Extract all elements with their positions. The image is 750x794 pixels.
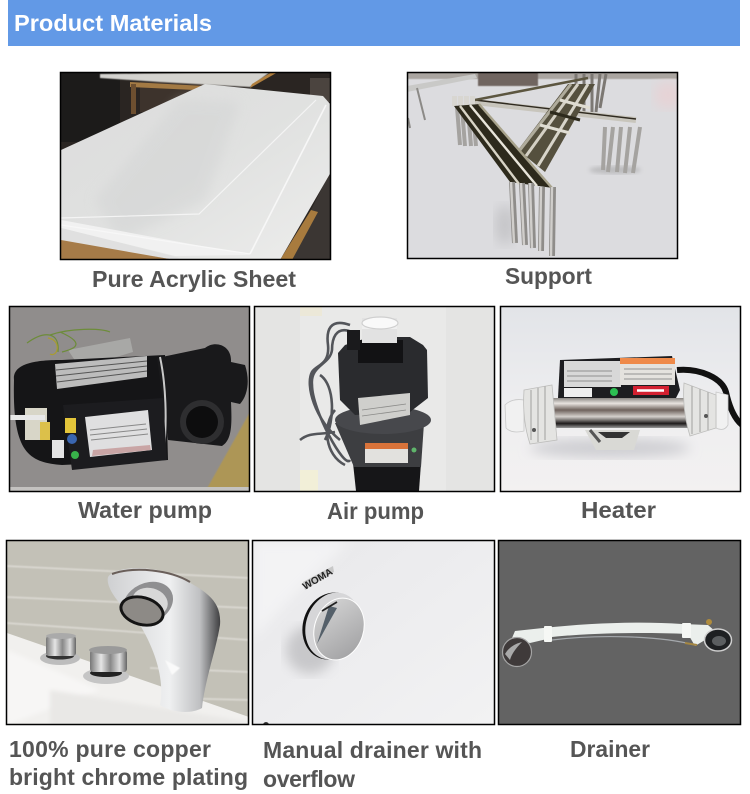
label: Drainer	[570, 736, 650, 762]
photo: drainer pipe	[498, 540, 741, 725]
label: Air pump	[327, 498, 424, 524]
photo: chrome faucet	[6, 540, 249, 725]
panel: drainer	[498, 540, 741, 762]
photo: heater	[500, 306, 742, 492]
label: bright chrome plating	[9, 764, 248, 790]
label: Heater	[581, 497, 656, 523]
label: 100% pure copper	[9, 736, 211, 762]
label	[9, 736, 248, 790]
label	[263, 737, 482, 792]
label: Manual drainer with	[263, 737, 482, 763]
photo: air pump	[254, 306, 495, 492]
panel: air pump	[254, 306, 495, 524]
panel: manual drainer	[252, 540, 495, 792]
panel: water pump	[9, 306, 250, 523]
label: Pure Acrylic Sheet	[92, 266, 296, 292]
photo: water pump	[9, 306, 250, 492]
photo: stainless support frame	[407, 72, 682, 259]
label: Water pump	[78, 497, 212, 523]
panel: pure acrylic sheet	[60, 72, 331, 292]
panel: heater	[500, 306, 742, 523]
header banner	[8, 0, 740, 46]
panel: support	[407, 72, 682, 289]
photo: acrylic sheet	[60, 72, 331, 260]
logo: WOMA	[301, 567, 335, 593]
label: Support	[505, 263, 592, 289]
panel: faucet	[6, 540, 249, 790]
title: Product Materials	[14, 10, 212, 36]
label: overflow	[263, 766, 355, 792]
photo: overflow drainer	[252, 540, 495, 728]
